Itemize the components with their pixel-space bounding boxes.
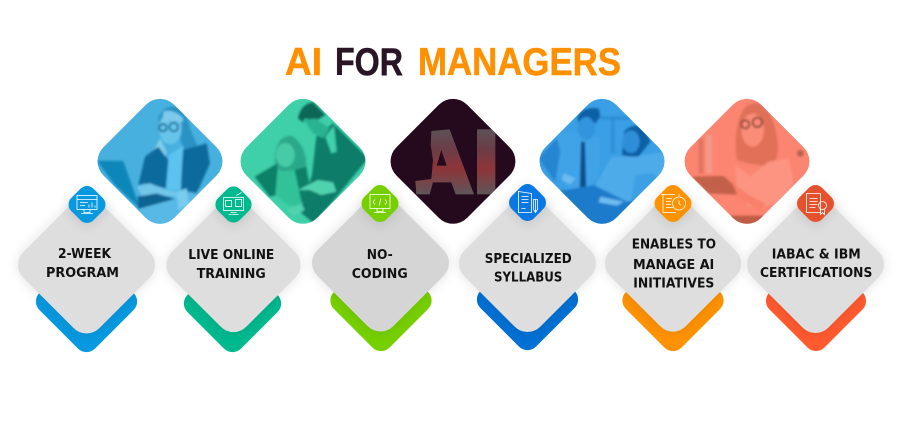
panel: live online training <box>159 183 308 357</box>
card shadow <box>452 188 603 339</box>
title <box>285 41 621 84</box>
label: CODING <box>352 267 408 282</box>
icon: monitor chart <box>65 182 109 227</box>
photo: woman with tablet <box>682 95 812 227</box>
chevron <box>325 245 437 356</box>
photo: AI lettering <box>388 95 518 227</box>
card diamond <box>597 188 749 339</box>
label: SYLLABUS <box>494 271 562 286</box>
AI letter shapes <box>415 129 495 194</box>
card diamond <box>305 187 456 339</box>
icon shadow <box>211 184 256 230</box>
card shadow <box>740 189 891 340</box>
icon: scroll and stopwatch <box>651 181 695 226</box>
panel: 2-week program <box>11 182 162 357</box>
label <box>632 238 716 292</box>
icon: syllabus document <box>505 180 550 225</box>
label: SPECIALIZED <box>485 252 572 267</box>
card shadow <box>159 190 308 340</box>
chevron <box>179 250 286 357</box>
icon: online training screen <box>212 183 255 226</box>
panel: specialized syllabus <box>452 180 603 355</box>
chevron <box>472 244 583 355</box>
icon shadow <box>793 183 838 229</box>
icon: code monitor <box>358 181 402 226</box>
label: INITIATIVES <box>633 277 714 292</box>
label: ENABLES TO <box>632 238 716 253</box>
icon shadow <box>64 184 110 230</box>
chevron <box>31 246 142 357</box>
card shadow <box>305 187 456 339</box>
title: AI <box>285 41 322 84</box>
label <box>485 252 572 286</box>
panel: enables to manage AI initiatives <box>597 181 749 356</box>
photo: colleagues at desk <box>238 95 368 227</box>
photo: two men in meeting <box>537 95 667 227</box>
card shadow <box>597 188 749 339</box>
panel: no-coding <box>305 181 456 356</box>
label: PROGRAM <box>46 266 119 281</box>
label <box>352 248 408 282</box>
label: LIVE ONLINE <box>188 248 274 263</box>
card shadow <box>11 189 162 341</box>
label: IABAC & IBM <box>772 247 861 262</box>
icon: certificate <box>793 181 838 226</box>
card diamond <box>159 190 308 340</box>
title: FOR <box>335 41 403 84</box>
label: MANAGE AI <box>633 258 714 273</box>
chevron <box>761 246 871 356</box>
label: 2-WEEK <box>58 247 112 262</box>
label <box>760 247 872 281</box>
label <box>46 247 119 281</box>
title: MANAGERS <box>418 41 621 84</box>
label: CERTIFICATIONS <box>760 266 872 281</box>
icon shadow <box>650 183 696 229</box>
card diamond <box>452 188 603 339</box>
card diamond <box>740 189 891 340</box>
panel: IABAC and IBM certifications <box>740 181 891 356</box>
label: TRAINING <box>197 267 266 282</box>
icon shadow <box>505 182 550 228</box>
label: NO- <box>367 248 393 263</box>
card diamond <box>11 189 162 341</box>
icon shadow <box>357 183 403 229</box>
photo: woman at laptop <box>95 95 225 227</box>
label <box>188 248 274 282</box>
chevron <box>617 245 729 356</box>
